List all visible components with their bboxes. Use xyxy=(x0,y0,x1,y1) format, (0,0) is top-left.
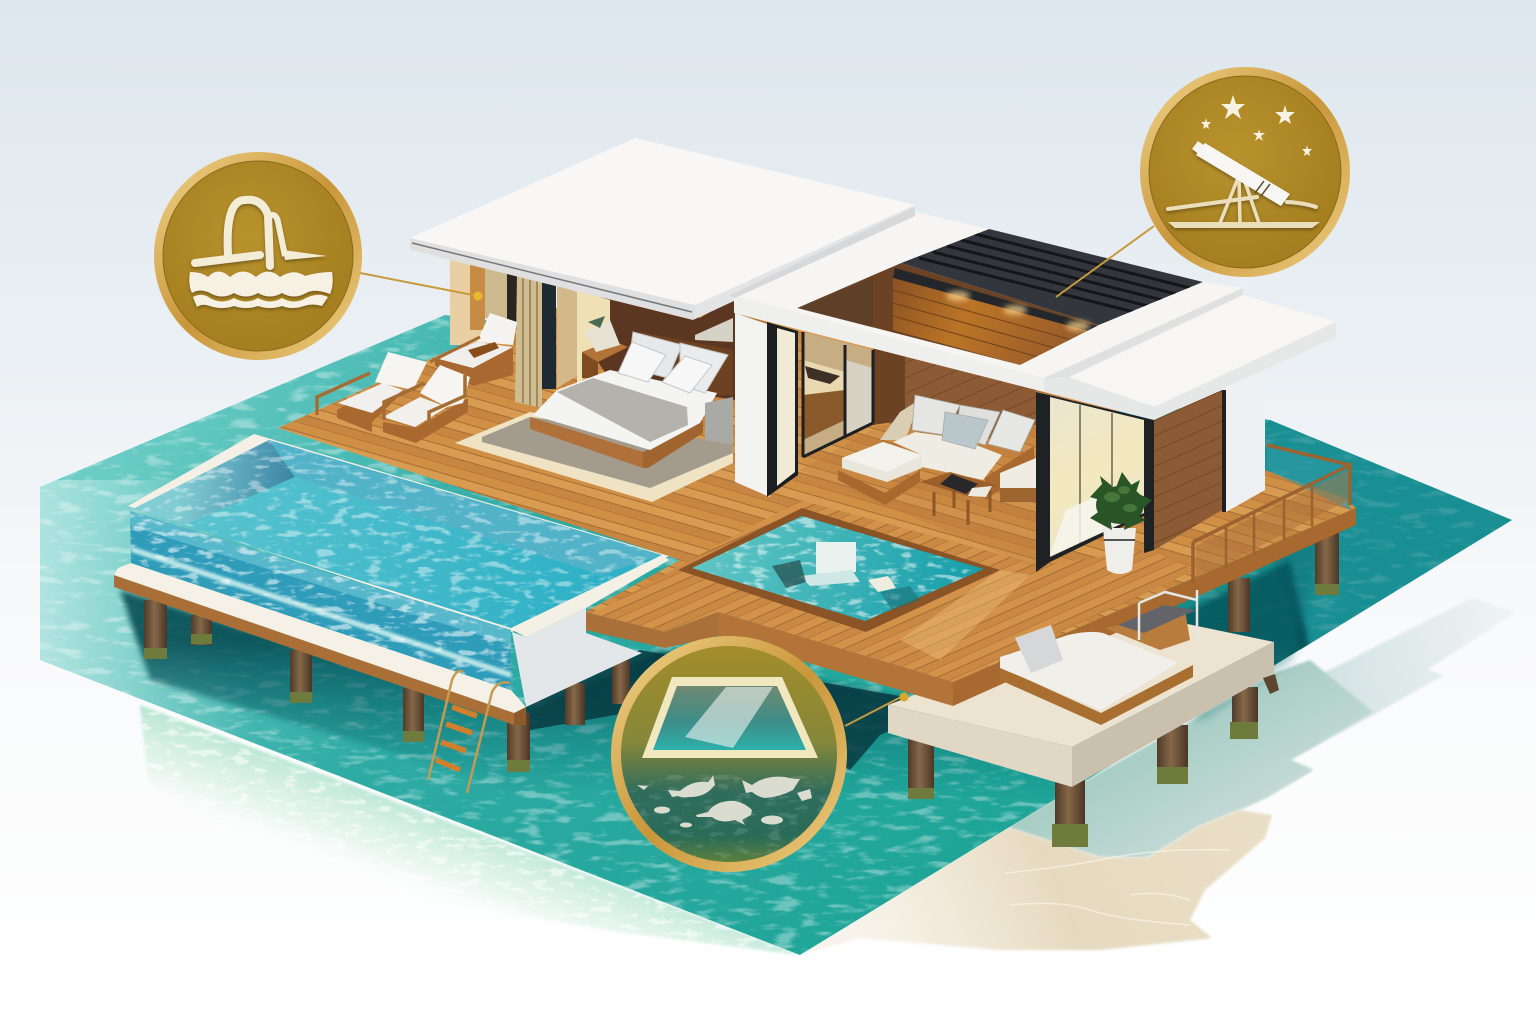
glass face foam band xyxy=(131,546,511,678)
daybed frame xyxy=(1000,665,1193,725)
stone platform xyxy=(888,612,1279,787)
main wooden deck xyxy=(278,300,1356,706)
bedroom glass side panel xyxy=(450,258,485,345)
ottoman xyxy=(838,442,922,505)
sofa arm xyxy=(880,398,922,440)
rear lounge chair xyxy=(430,313,517,386)
pool back tile wall xyxy=(269,440,662,575)
wall art shelf xyxy=(695,318,733,342)
balcony railing xyxy=(1193,445,1350,584)
medallion water rippling xyxy=(621,775,837,865)
potted plant xyxy=(1090,472,1152,574)
connector: pool medallion xyxy=(360,273,482,300)
sea surface xyxy=(40,315,1512,955)
lounge roof with pergola xyxy=(730,207,1336,420)
left lounge chair xyxy=(317,352,427,432)
left curtain xyxy=(485,265,507,320)
ladder steps xyxy=(436,707,477,770)
side bench xyxy=(1118,590,1197,640)
pillow xyxy=(1015,625,1063,673)
icon: pool ladder and waves xyxy=(189,200,333,308)
plunge pool with glass floor xyxy=(678,500,1000,632)
brown wood wall xyxy=(1154,390,1222,550)
interior upper glass xyxy=(799,278,873,330)
infinity pool xyxy=(120,430,670,707)
medallion: stargazing telescope xyxy=(1140,67,1350,277)
white corner pillar xyxy=(735,313,770,497)
pool ladder xyxy=(428,671,510,793)
centre curtain xyxy=(515,275,542,408)
front lounge chair xyxy=(383,365,470,443)
dark frame and pale glass xyxy=(767,322,798,497)
left white band xyxy=(730,212,989,308)
back cushions xyxy=(912,395,1035,452)
right sofa section xyxy=(985,446,1036,502)
pale shallow water fading below the sea edge xyxy=(140,700,800,955)
daybed wood surround behind bench xyxy=(1105,610,1190,650)
right roof face xyxy=(1044,322,1336,420)
sand foam lines xyxy=(1005,850,1230,925)
lounge interior and walls xyxy=(735,313,1036,497)
bed xyxy=(530,332,733,468)
interior back wood wall xyxy=(873,345,1036,440)
front glass sliding door xyxy=(1036,392,1154,572)
lounge exterior cladding xyxy=(1154,368,1265,550)
rear balcony mesh xyxy=(1267,445,1350,510)
medallion: infinity pool xyxy=(154,152,362,360)
glass door xyxy=(557,285,577,388)
pergola louvres xyxy=(893,229,1203,332)
connector: stargazing medallion xyxy=(1056,226,1154,297)
bed frame side xyxy=(643,420,703,468)
coffee table xyxy=(920,472,997,525)
bedroom-side glass doors xyxy=(803,332,873,457)
cream niche wall xyxy=(577,290,610,388)
icon: stars xyxy=(1201,95,1312,156)
dark interior behind the opening xyxy=(797,263,1099,365)
nightstand with plant xyxy=(582,316,628,378)
shallow water inside the villa shadow xyxy=(1007,660,1373,858)
medallion: glass floor with fish xyxy=(611,636,847,872)
bedroom roof xyxy=(410,138,915,320)
mattress xyxy=(533,370,717,450)
pool glass front face xyxy=(130,511,511,690)
icon: glass panel xyxy=(642,677,818,758)
pool right rim xyxy=(512,555,669,637)
pillows xyxy=(618,332,728,393)
pool water surface xyxy=(185,477,601,628)
ladder rails xyxy=(428,671,510,793)
pool support platform xyxy=(114,563,526,725)
sand shallows xyxy=(800,810,1272,955)
floor shadow under lounge xyxy=(800,425,1036,568)
carpet xyxy=(455,412,733,502)
right nightstand xyxy=(705,397,733,445)
pale left corner of water xyxy=(40,480,241,738)
headboard xyxy=(622,332,733,395)
glass face ripple texture xyxy=(130,513,511,690)
back wall xyxy=(577,288,735,400)
glowing wood wall xyxy=(893,278,1092,365)
front white beam face xyxy=(734,295,1044,392)
daybed xyxy=(1000,590,1197,725)
grey rug xyxy=(482,417,733,488)
pool white rim xyxy=(128,434,669,632)
bed frame front xyxy=(530,417,643,468)
connector: glass floor medallion xyxy=(845,692,908,726)
grey runner xyxy=(557,378,688,442)
pool inner basin xyxy=(133,440,662,628)
pool white end wall xyxy=(512,608,642,707)
sofa group xyxy=(838,395,1036,525)
icon: fish xyxy=(637,775,812,828)
front white beam top xyxy=(730,282,1243,378)
white end wall xyxy=(1226,368,1265,512)
right strip ridge xyxy=(1044,288,1243,392)
bedroom interior xyxy=(450,258,735,502)
lounge chairs on the deck xyxy=(317,313,517,443)
mattress xyxy=(1000,632,1178,710)
glass face upper band xyxy=(130,511,511,645)
water shadow beneath villa xyxy=(118,544,1315,784)
right roof top xyxy=(1069,295,1336,407)
icon: telescope xyxy=(1168,141,1320,228)
pool left inner wall xyxy=(133,440,295,525)
sofa seat xyxy=(893,432,1002,480)
stilts supporting the deck xyxy=(144,530,1339,847)
stepped villa shadow on the white ground xyxy=(1239,598,1516,810)
pool ripple texture xyxy=(138,440,649,626)
